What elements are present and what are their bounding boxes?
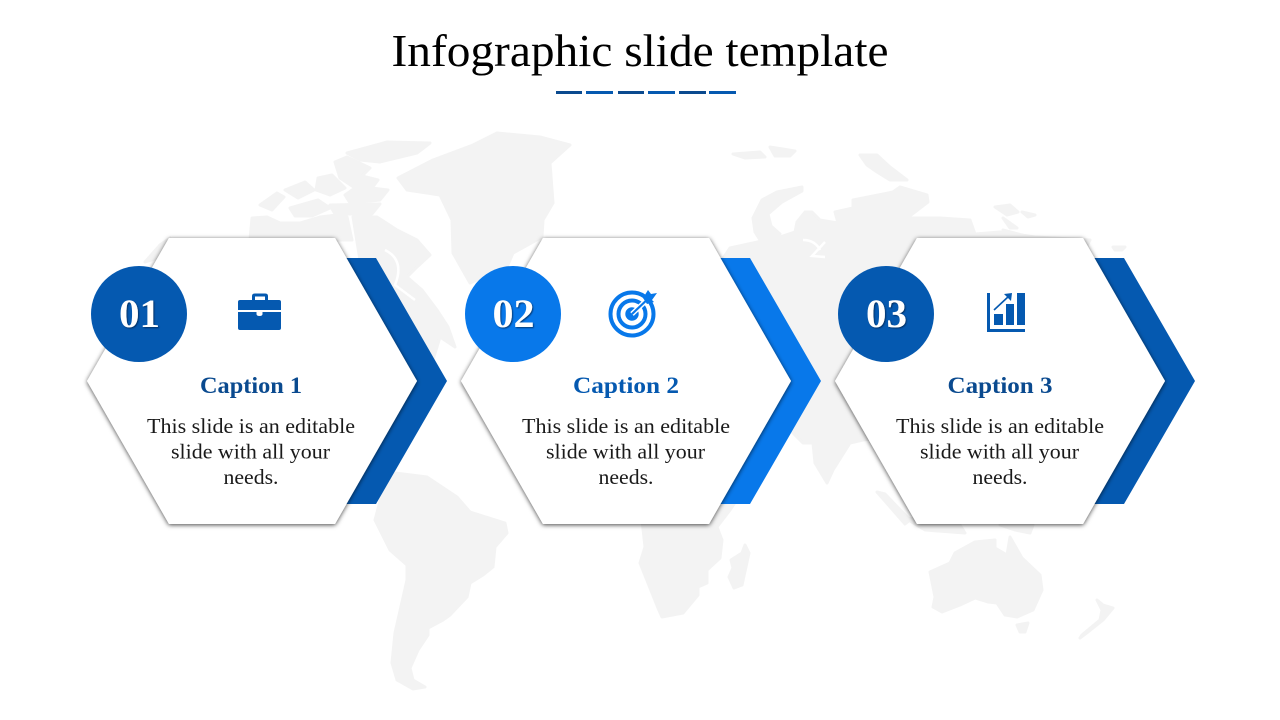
description 3: needs. [972,465,1028,489]
panel: step 2 [461,238,821,524]
icon: target [610,290,657,336]
description 1 [147,414,355,489]
hexagon 1 [87,238,417,524]
caption 2: Caption 2 [573,373,679,398]
number badge 01: 01 [119,291,160,336]
panel: step 1 [87,238,447,524]
icon: bar chart [987,293,1025,332]
description 3 [896,414,1104,489]
caption 1: Caption 1 [200,373,302,398]
description 2: needs. [598,465,654,489]
number badge 03: 03 [866,291,907,336]
description 2 [522,414,730,489]
description 1: slide with all your [171,440,330,464]
caption 3: Caption 3 [948,373,1052,398]
chevron 3 [1088,258,1195,504]
chevron 2 [714,258,821,504]
icon: briefcase [238,294,281,330]
description 2: This slide is an editable [522,414,730,438]
panel: step 3 [835,238,1195,524]
description 3: This slide is an editable [896,414,1104,438]
description 1: needs. [224,465,278,489]
description 3: slide with all your [920,440,1079,464]
number badge 01 [91,266,187,362]
number badge 03 [838,266,934,362]
chevron 1 [340,258,447,504]
title divider [556,91,736,94]
description 2: slide with all your [546,440,705,464]
hexagon 2 [461,238,791,524]
number badge 02 [465,266,561,362]
description 1: This slide is an editable [147,414,355,438]
world map background [145,133,1125,689]
hexagon 3 [835,238,1165,524]
title: Infographic slide template [392,25,888,76]
number badge 02: 02 [492,291,534,336]
